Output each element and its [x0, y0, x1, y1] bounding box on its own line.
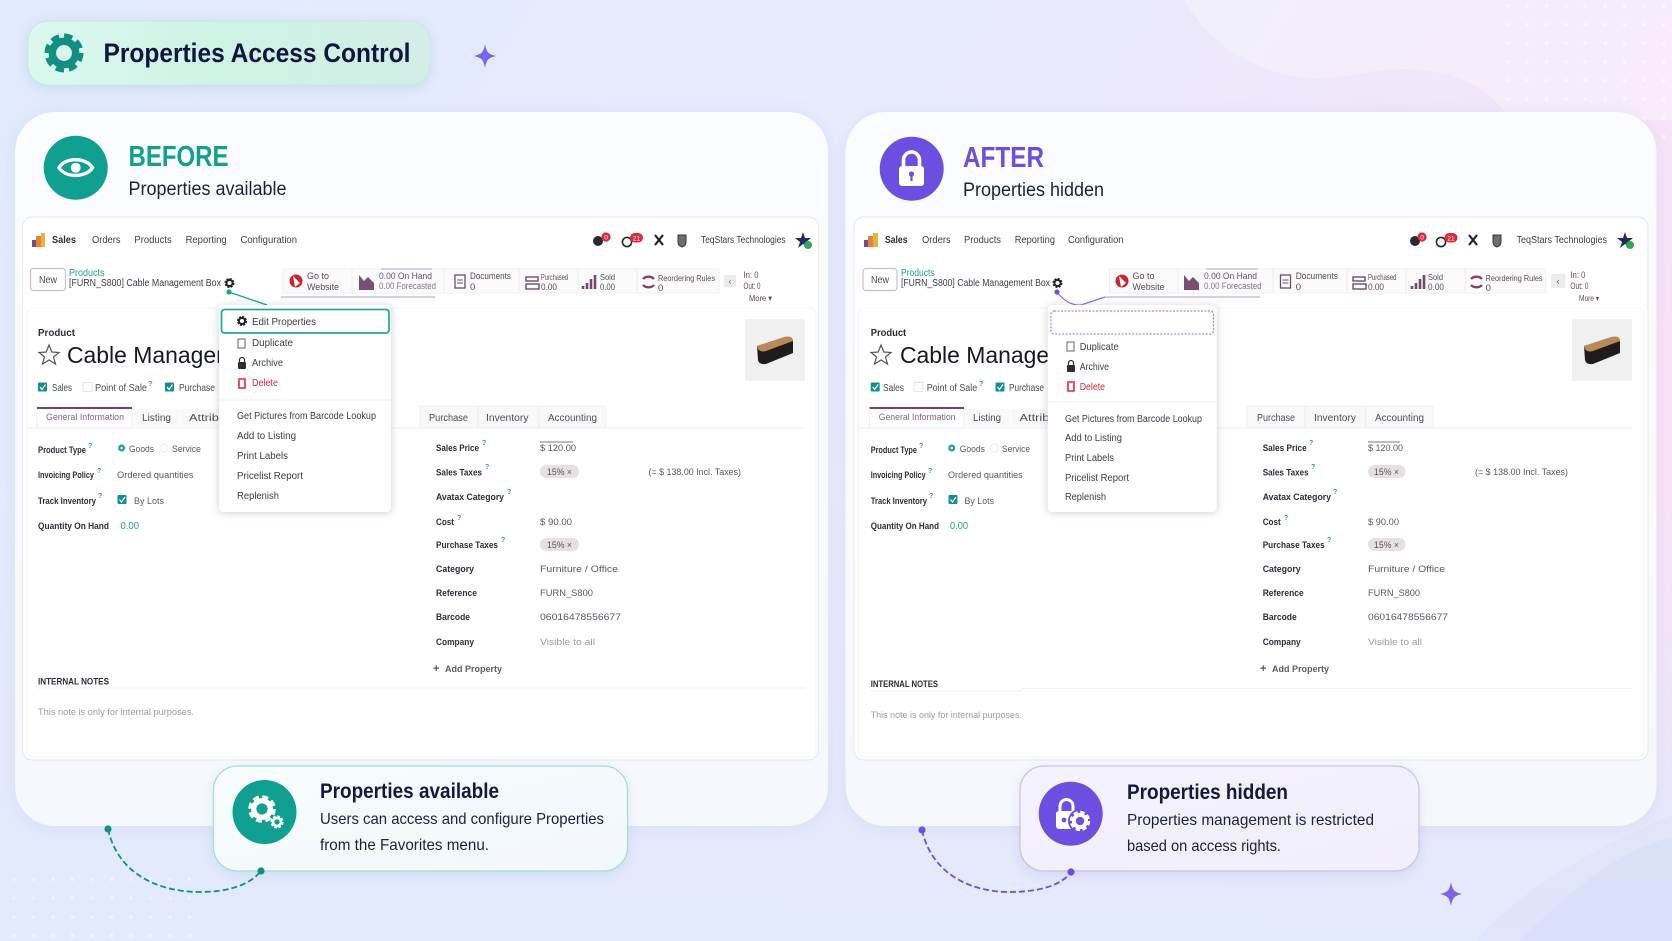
- form card: 15% ×: [547, 467, 572, 477]
- form card: By Lots: [964, 496, 994, 507]
- dropdown menu: [219, 305, 391, 512]
- breadcrumb row: Products: [69, 268, 104, 279]
- callout: after: Properties hidden: [1127, 781, 1288, 804]
- dropdown menu: Get Pictures from Barcode Lookup: [1065, 414, 1202, 425]
- stat buttons: 0.00: [1368, 282, 1384, 293]
- arrow: after dashed curve: [918, 826, 1075, 892]
- dropdown menu: Add to Listing: [237, 431, 296, 442]
- form card: Furniture / Office: [540, 564, 618, 575]
- tabs: [858, 427, 1632, 429]
- stat buttons: ‹: [1556, 276, 1560, 286]
- dropdown menu: Archive: [1080, 362, 1109, 373]
- stat buttons: Go to: [1132, 271, 1154, 282]
- panel: after: [846, 112, 1656, 826]
- form card: Add Property: [1272, 664, 1330, 675]
- form card: Accounting: [548, 413, 597, 424]
- stat buttons: 0: [470, 282, 475, 293]
- stat buttons: 0.00 On Hand: [1204, 271, 1257, 282]
- form card: ?: [919, 443, 923, 450]
- stat buttons: [281, 269, 773, 303]
- form card: ?: [88, 443, 92, 450]
- form card: ?: [1311, 464, 1315, 471]
- form card: ?: [929, 493, 933, 500]
- icon: lock and gear badge: [1039, 782, 1103, 846]
- navigation bar: 0: [1420, 234, 1424, 242]
- navigation bar: Configuration: [1068, 235, 1124, 246]
- form card: Category: [436, 564, 475, 575]
- breadcrumb row: [30, 268, 234, 290]
- form card: Company: [1263, 637, 1301, 648]
- callout: after: based on access rights.: [1127, 838, 1281, 855]
- form card: Listing: [142, 413, 171, 424]
- stat buttons: 0.00 On Hand: [379, 271, 432, 282]
- navigation bar: [32, 232, 812, 249]
- stat buttons: Sold: [1428, 272, 1443, 282]
- form card: $ 120.00: [540, 443, 576, 454]
- navigation bar: Sales: [52, 235, 76, 246]
- arrow: before dashed curve: [104, 825, 265, 892]
- dropdown menu: Edit Properties: [252, 317, 316, 328]
- screenshot: before: [22, 217, 818, 760]
- form card: Goods: [960, 444, 985, 455]
- callout: before: from the Favorites menu.: [320, 837, 489, 854]
- form card: This note is only for internal purposes.: [871, 710, 1022, 721]
- form card: Reference: [436, 588, 477, 599]
- form card: Purchase: [179, 383, 215, 394]
- stat buttons: Out: 0: [744, 281, 760, 292]
- dropdown menu: Get Pictures from Barcode Lookup: [237, 411, 376, 422]
- product image: [745, 319, 805, 381]
- form card: 15% ×: [1374, 467, 1399, 477]
- form card: Point of Sale: [95, 383, 147, 394]
- form card: Service: [1002, 444, 1030, 455]
- dropdown menu: Print Labels: [237, 451, 288, 462]
- form card: Quantity On Hand: [871, 521, 939, 532]
- stat buttons: 0: [658, 283, 663, 294]
- form card: Company: [436, 637, 475, 648]
- form card: Accounting: [1375, 413, 1424, 424]
- navigation bar: TeqStars Technologies: [1516, 235, 1607, 246]
- stat buttons: Documents: [470, 271, 511, 282]
- dropdown menu: [1048, 305, 1217, 512]
- form card: ?: [979, 381, 983, 388]
- dropdown menu: Delete: [252, 378, 278, 389]
- callout: after: [1020, 766, 1419, 871]
- breadcrumb row: [863, 268, 1062, 290]
- stat buttons: Purchased: [541, 272, 568, 282]
- form card: ?: [97, 468, 101, 475]
- right fields: Sales Price: [1263, 443, 1307, 454]
- form card: Product: [38, 327, 75, 339]
- navigation bar: Orders: [922, 235, 951, 246]
- connector line: [226, 289, 267, 305]
- stat buttons: 0.00: [1428, 282, 1444, 293]
- left fields: Product Type: [38, 445, 86, 456]
- form card: Purchase Taxes: [1263, 540, 1325, 551]
- callout: before: [214, 766, 628, 871]
- form card: Reference: [1263, 588, 1304, 599]
- form card: Track Inventory: [38, 496, 97, 507]
- icon: gears badge: [232, 780, 296, 844]
- navigation bar: Products: [134, 235, 172, 246]
- dropdown menu: Duplicate: [1080, 342, 1119, 353]
- form card: Barcode: [436, 612, 470, 623]
- form card: ?: [457, 515, 461, 522]
- form card: Invoicing Policy: [38, 470, 95, 481]
- stat buttons: Reordering Rules: [1486, 273, 1543, 283]
- form card: Cable Management Box: [67, 342, 313, 368]
- form card: Sales: [883, 383, 904, 394]
- navigation bar: Reporting: [186, 235, 227, 246]
- form card: Purchase: [1257, 413, 1295, 424]
- form card: Quantity On Hand: [38, 521, 109, 532]
- breadcrumb row: New: [871, 275, 890, 286]
- callout: after: Properties management is restricted: [1127, 812, 1374, 829]
- stat buttons: Out: 0: [1570, 281, 1588, 292]
- form card: Avatax Category: [436, 492, 505, 503]
- stat buttons: Sold: [600, 272, 615, 282]
- internal notes: INTERNAL NOTES: [871, 679, 938, 690]
- dropdown menu: Duplicate: [252, 338, 293, 349]
- form card: Goods: [129, 444, 154, 455]
- form card: Visible to all: [540, 637, 595, 648]
- product image: [1572, 319, 1632, 381]
- stat buttons: Go to: [307, 271, 329, 282]
- tabs: [27, 427, 804, 429]
- left fields: Product Type: [871, 445, 917, 456]
- form card: Sales Taxes: [1263, 468, 1309, 478]
- breadcrumb row: [FURN_S800] Cable Management Box: [901, 278, 1050, 289]
- form card: Point of Sale: [927, 383, 978, 394]
- form card: ?: [1309, 440, 1313, 447]
- form card: Add Property: [445, 664, 503, 675]
- form card: By Lots: [134, 496, 164, 507]
- dropdown menu: Replenish: [237, 491, 279, 502]
- form card: Product: [871, 327, 907, 339]
- form card: General Information: [879, 412, 956, 423]
- form card: FURN_S800: [540, 588, 593, 599]
- form card: ?: [148, 381, 152, 388]
- form card: This note is only for internal purposes.: [38, 707, 194, 718]
- stat buttons: 0.00 Forecasted: [1204, 281, 1262, 291]
- form card: Inventory: [1314, 413, 1356, 424]
- form card: Ordered quantities: [948, 470, 1023, 481]
- navigation bar: 21: [1447, 236, 1455, 242]
- stat buttons: Documents: [1296, 271, 1338, 282]
- form card: +: [433, 663, 439, 675]
- form card: ?: [507, 489, 511, 496]
- navigation bar: TeqStars Technologies: [701, 235, 786, 246]
- after subheading: Properties hidden: [963, 180, 1104, 201]
- stat buttons: In: 0: [1570, 270, 1585, 281]
- form card: [858, 308, 1644, 757]
- icon: sparkle bottom: [1440, 882, 1462, 906]
- icon: eye badge: [44, 136, 108, 200]
- right fields: Sales Price: [436, 443, 479, 454]
- stat buttons: Purchased: [1368, 272, 1397, 282]
- breadcrumb row: [FURN_S800] Cable Management Box: [69, 278, 221, 289]
- form card: Service: [172, 444, 201, 455]
- form card: 15% ×: [547, 540, 572, 550]
- breadcrumb row: New: [39, 275, 58, 286]
- dropdown menu: Add to Listing: [1065, 433, 1122, 444]
- form card: Invoicing Policy: [871, 470, 926, 481]
- form card: Sales: [52, 383, 72, 394]
- form card: ?: [501, 537, 505, 544]
- form card: Attributes: [189, 413, 243, 424]
- navigation bar: Orders: [92, 235, 120, 246]
- screenshot: after: [854, 217, 1648, 760]
- navigation bar: 0: [604, 234, 608, 242]
- form card: Attributes: [1020, 413, 1074, 424]
- form card: Visible to all: [1368, 637, 1422, 648]
- stat buttons: 0.00: [600, 282, 615, 293]
- callout: before: Properties available: [320, 780, 499, 803]
- form card: Listing: [973, 413, 1001, 424]
- form card: ?: [1284, 515, 1288, 522]
- icon: sparkle top: [474, 44, 496, 68]
- navigation bar: Configuration: [240, 235, 297, 246]
- form card: Category: [1263, 564, 1301, 575]
- form card: 06016478556677: [540, 612, 621, 623]
- title pill: [28, 21, 430, 85]
- form card: ?: [482, 440, 486, 447]
- form card: FURN_S800: [1368, 588, 1420, 599]
- before subheading: Properties available: [128, 179, 286, 200]
- navigation bar: Reporting: [1015, 235, 1055, 246]
- form card: Purchase: [1009, 383, 1044, 394]
- icon: gear: [47, 36, 81, 70]
- form card: ?: [485, 464, 489, 471]
- form card: +: [1260, 663, 1266, 675]
- form card: Ordered quantities: [117, 470, 194, 481]
- form card: Cost: [1263, 517, 1281, 528]
- form card: Purchase: [429, 413, 468, 424]
- form card: $ 90.00: [540, 517, 572, 528]
- form card: ?: [1327, 537, 1331, 544]
- stat buttons: Website: [1132, 282, 1164, 293]
- stat buttons: 0: [1486, 283, 1491, 294]
- form card: 0.00: [120, 521, 139, 532]
- form card: Purchase Taxes: [436, 540, 498, 551]
- form card: [27, 308, 816, 757]
- form card: Barcode: [1263, 612, 1297, 623]
- form card: (= $ 138.00 Incl. Taxes): [1475, 467, 1568, 478]
- stat buttons: Reordering Rules: [658, 273, 715, 283]
- form card: Furniture / Office: [1368, 564, 1445, 575]
- stat buttons: In: 0: [744, 270, 758, 281]
- stat buttons: 0.00 Forecasted: [379, 281, 436, 291]
- navigation bar: [864, 232, 1634, 249]
- panel: before: [15, 112, 828, 826]
- after heading: AFTER: [963, 142, 1044, 174]
- form card: Sales Taxes: [436, 468, 482, 478]
- stat buttons: Website: [307, 282, 339, 293]
- breadcrumb row: Products: [901, 268, 935, 279]
- before heading: BEFORE: [128, 141, 228, 173]
- callout: before: Users can access and configure Properties: [320, 811, 604, 828]
- title: Properties Access Control: [104, 38, 410, 68]
- navigation bar: Sales: [885, 235, 908, 246]
- form card: ?: [1333, 489, 1337, 496]
- navigation bar: Products: [964, 235, 1001, 246]
- stat buttons: 0: [1296, 282, 1301, 293]
- icon: lock badge: [880, 137, 944, 201]
- stat buttons: More ▾: [749, 293, 773, 303]
- form card: ?: [98, 493, 102, 500]
- form card: (= $ 138.00 Incl. Taxes): [648, 467, 741, 478]
- form card: Inventory: [486, 413, 528, 424]
- stat buttons: More ▾: [1579, 294, 1599, 303]
- stat buttons: 0.00: [541, 282, 557, 293]
- form card: 06016478556677: [1368, 612, 1448, 623]
- dropdown menu: Replenish: [1065, 492, 1106, 503]
- form card: ?: [928, 468, 932, 475]
- form card: Avatax Category: [1263, 492, 1332, 503]
- form card: Track Inventory: [871, 496, 928, 507]
- form card: 15% ×: [1374, 540, 1399, 550]
- form card: 0.00: [950, 521, 968, 532]
- form card: Cable Management Box: [900, 342, 1146, 368]
- form card: $ 90.00: [1368, 517, 1399, 528]
- dropdown menu: Pricelist Report: [237, 471, 303, 482]
- dropdown menu: Print Labels: [1065, 453, 1114, 464]
- form card: $ 120.00: [1368, 443, 1403, 454]
- form card: General Information: [46, 412, 124, 423]
- internal notes: INTERNAL NOTES: [38, 676, 109, 688]
- dropdown menu: Pricelist Report: [1065, 473, 1129, 484]
- navigation bar: 21: [633, 236, 640, 242]
- dropdown menu: Delete: [1080, 382, 1105, 393]
- connector line: [1054, 289, 1105, 305]
- stat buttons: [1105, 269, 1599, 303]
- stat buttons: ‹: [729, 277, 732, 286]
- form card: Cost: [436, 517, 455, 528]
- dropdown menu: Archive: [252, 358, 283, 369]
